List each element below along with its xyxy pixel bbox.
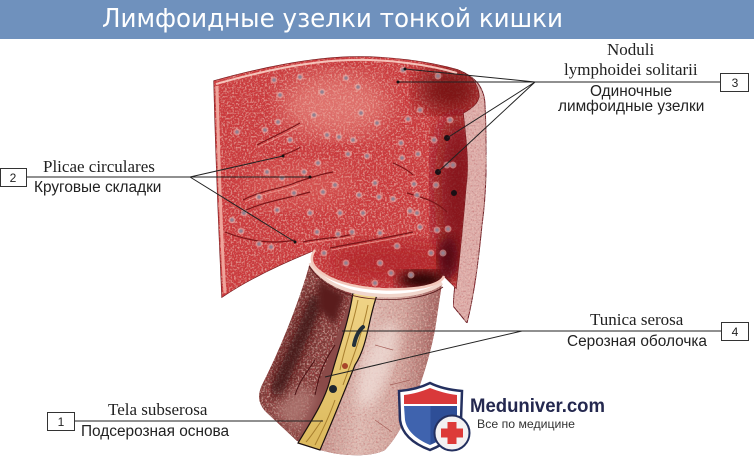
label: Tela subserosa: Tela subserosa <box>108 400 208 419</box>
number box 2 <box>0 168 26 186</box>
tagline: Все по медицине <box>477 417 575 431</box>
light right side of tube <box>320 283 442 455</box>
title: Лимфоидные узелки тонкой кишки <box>102 4 563 34</box>
leader lines and labels: 3 solitary nodules <box>396 40 748 172</box>
wordmark: Meduniver.com <box>470 396 605 417</box>
vessels in strip <box>354 327 363 345</box>
solitary lymphoid nodules <box>232 70 454 283</box>
label: Noduli lymphoidei solitarii: Noduli <box>607 40 654 59</box>
icon: shield with red cross <box>399 383 470 450</box>
title banner <box>0 0 754 39</box>
yellow subserosa strip <box>298 293 377 450</box>
outer serosal strip on right of opened wall <box>453 70 486 323</box>
mucosal sheet with circular folds <box>205 50 485 300</box>
folds <box>225 123 447 248</box>
number box 3: 3 <box>732 76 739 90</box>
label: Plicae circulares: Круговые складки <box>34 179 161 196</box>
dark left side of tube <box>255 263 353 441</box>
label: Tela subserosa <box>81 400 230 440</box>
number box 4: 4 <box>732 325 739 339</box>
rim of tube <box>310 263 442 296</box>
label: Tunica serosa: Tunica serosa <box>590 310 684 329</box>
label: Tunica serosa <box>567 310 707 350</box>
number box 1 <box>48 412 74 430</box>
leader lines and labels: 1 tela subserosa <box>48 400 323 440</box>
label: Tunica serosa: Серозная оболочка <box>567 333 707 350</box>
label: Noduli lymphoidei solitarii: Одиночные <box>590 83 672 100</box>
leader lines and labels: 4 tunica serosa <box>325 310 748 377</box>
label: Plicae circulares <box>34 157 161 196</box>
tube of the small intestine <box>259 262 444 456</box>
illustration: small intestine section <box>205 50 486 460</box>
label: Plicae circulares: Plicae circulares <box>43 157 155 176</box>
number box 2: 2 <box>10 171 17 185</box>
label: Noduli lymphoidei solitarii: lymphoidei solitarii <box>564 60 698 79</box>
number box 3 <box>720 74 748 92</box>
number box 4 <box>722 322 748 340</box>
logo: Meduniver <box>399 383 605 450</box>
number box 1: 1 <box>58 415 65 429</box>
leader lines and labels: 2 circular folds <box>0 154 312 244</box>
pale margin of sheet <box>216 60 457 84</box>
label: Noduli lymphoidei solitarii: лимфоидные узелки <box>558 98 704 115</box>
label: Tela subserosa: Подсерозная основа <box>81 423 230 440</box>
label: Noduli lymphoidei solitarii <box>558 40 704 115</box>
